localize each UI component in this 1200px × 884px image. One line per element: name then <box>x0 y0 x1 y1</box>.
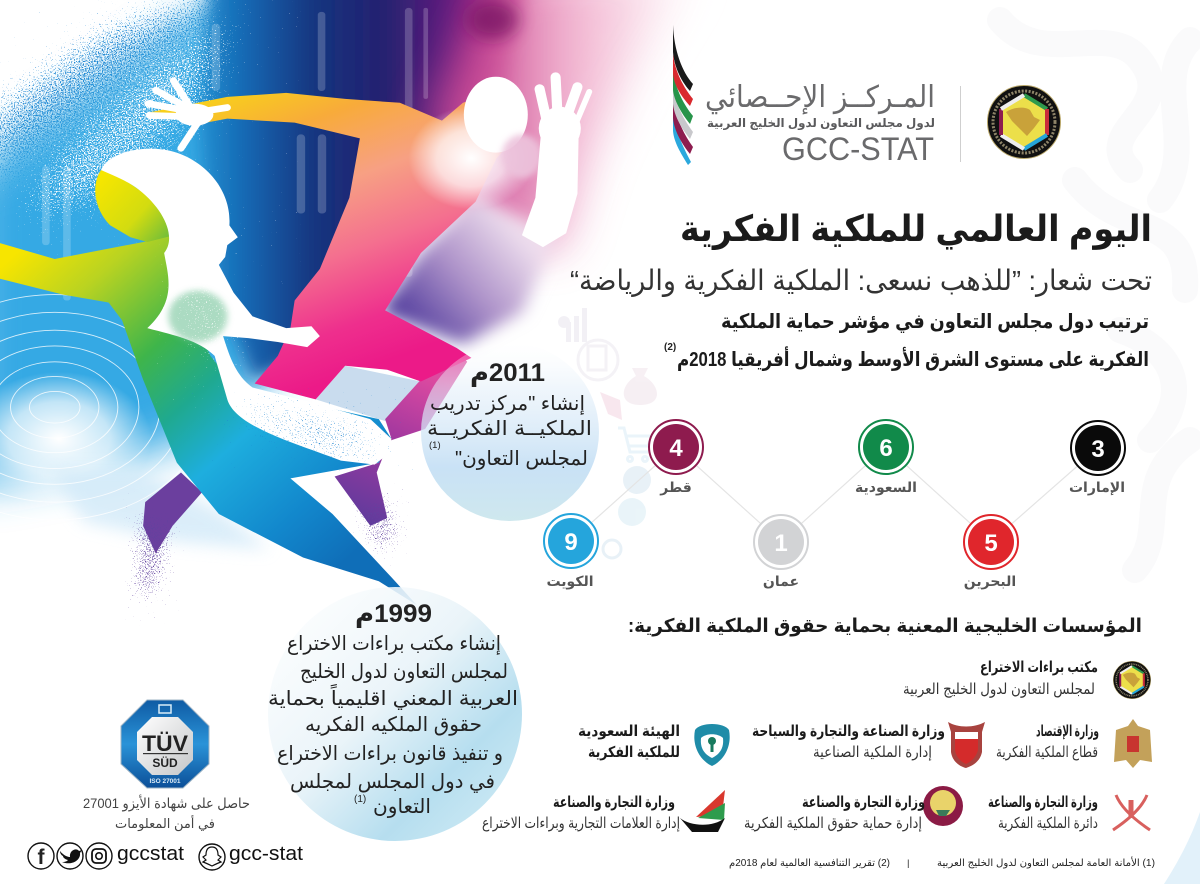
badge: TUV SUD ISO 27001 <box>121 700 209 788</box>
logo arabic name: المـركــز الإحــصائي <box>705 81 935 115</box>
runner 1: head <box>464 77 528 153</box>
icon: bar chart <box>558 308 587 342</box>
rank: Qatar: 4 <box>669 435 683 462</box>
spray: front foot <box>362 498 400 550</box>
text: line 2: الملكيــة الفكريــة <box>427 418 592 440</box>
logo: Saudi shield <box>694 724 730 766</box>
faint icons behind circle <box>558 308 657 558</box>
text: line 2: لمجلس التعاون لدول الخليج <box>300 661 508 683</box>
institution: Kuwait <box>482 790 725 832</box>
runner 2: back leg purple <box>143 473 202 554</box>
icon: handshake plant <box>600 392 622 420</box>
logo arabic subtitle: لدول مجلس التعاون لدول الخليج العربية <box>707 116 935 131</box>
text: line 7: التعاون <box>373 796 431 818</box>
runner 1: pale pink ear shadow <box>502 134 542 178</box>
runner 2: blue paint flecks on thigh <box>236 403 381 455</box>
rank: Qatar: قطر <box>659 479 692 496</box>
circle fill <box>421 343 599 521</box>
spray: white flecks on torso edge <box>173 269 231 380</box>
footnote 2: (2) تقرير التنافسية العالمية لعام 2018م <box>729 858 890 869</box>
artwork: two colour-splash runners <box>0 0 690 605</box>
pale mist at lower left <box>51 471 269 550</box>
swirl rings <box>0 295 206 520</box>
text: line 1: إنشاء مكتب براءات الاختراع <box>287 633 501 656</box>
rank: Oman <box>754 515 808 589</box>
bottom-right corner arc <box>1164 812 1200 884</box>
octagon <box>121 700 209 788</box>
name: وزارة التجارة والصناعة <box>988 794 1098 811</box>
splash: dark magenta smudge <box>467 0 518 40</box>
institution: Oman <box>988 794 1150 832</box>
icon: snapchat <box>199 844 225 870</box>
rank: UAE <box>1069 421 1125 496</box>
rank: Qatar <box>649 420 703 496</box>
spray: white dust on blue <box>17 12 236 221</box>
icon: shopping cart <box>618 428 652 462</box>
year 1999: 1999م <box>355 600 432 628</box>
institution: Saudi Arabia <box>578 723 730 766</box>
icon: gear <box>618 498 646 526</box>
icon: facebook: f <box>38 846 46 869</box>
icon: globe <box>623 466 651 494</box>
rank: Bahrain: البحرين <box>964 573 1016 590</box>
icon: tag <box>603 540 621 558</box>
name: وزارة التجارة والصناعة <box>553 794 675 811</box>
TUV: TÜV <box>142 731 188 756</box>
rank: Oman: 1 <box>774 530 788 557</box>
binary code columns <box>42 8 428 301</box>
name: وزارة التجارة والصناعة <box>802 794 925 811</box>
text: line 1: إنشاء "مركز تدريب <box>430 393 585 416</box>
runner 2: white head, chest and leading arm <box>101 149 391 465</box>
splash: dark blue to purple band <box>198 0 535 380</box>
footnote mark 2: (2) <box>664 342 676 353</box>
department: لمجلس التعاون لدول الخليج العربية <box>903 681 1095 698</box>
footnote separator: | <box>907 858 909 869</box>
rank: UAE: 3 <box>1091 436 1105 463</box>
logo latin name: GCC-STAT <box>782 131 934 167</box>
icon: instagram <box>86 843 112 869</box>
circle: 1999 <box>268 587 522 841</box>
icon: twitter <box>57 843 83 869</box>
icon: facebook <box>28 843 54 869</box>
logo: GCC-STAT <box>673 25 935 167</box>
institution: Bahrain <box>752 722 985 768</box>
heading: institutions: المؤسسات الخليجية المعنية بحماية حقوق الملكية الفكرية: <box>628 616 1142 637</box>
rank: Saudi Arabia: 6 <box>879 435 893 462</box>
text: line 4: حقوق الملكيه الفكريه <box>305 714 482 736</box>
rank: UAE: الإمارات <box>1069 479 1125 496</box>
text: line 6: في دول المجلس لمجلس <box>290 771 495 794</box>
subtitle: تحت شعار: ”للذهب نسعى: الملكية الفكرية والرياضة“ <box>570 265 1152 297</box>
institution: UAE <box>996 719 1152 768</box>
social icons <box>28 843 225 870</box>
icon: document <box>578 340 618 380</box>
ISO: ISO 27001 <box>149 778 181 785</box>
pale fill between legs <box>316 366 421 423</box>
icon: money bag <box>624 368 657 405</box>
text: line 3: لمجلس التعاون" <box>455 448 588 470</box>
name: وزارة الصناعة والتجارة والسياحة <box>752 723 945 740</box>
ribbon <box>673 25 693 165</box>
social handle: gcc-stat: gcc-stat <box>229 843 303 865</box>
runner 1: forward hand <box>148 81 227 148</box>
inner plate <box>137 717 193 775</box>
logo: Kuwait dhow <box>680 790 725 832</box>
splash: pink <box>429 0 690 253</box>
logo: GCC seal <box>988 86 1060 158</box>
runner 1: lower leg <box>335 354 467 526</box>
monitor icon <box>159 705 171 713</box>
background watermark calligraphy <box>1000 20 1190 570</box>
badge caption line 2: في أمن المعلومات <box>115 815 215 832</box>
runner 2: hair <box>95 170 182 242</box>
footnote mark: (1) <box>354 794 366 805</box>
department: للملكية الفكرية <box>588 744 680 761</box>
runner 1: body <box>147 91 522 399</box>
name: الهيئة السعودية <box>578 723 680 740</box>
rank: Saudi Arabia <box>855 420 917 496</box>
rank: Saudi Arabia: السعودية <box>855 479 917 496</box>
institution: Qatar <box>744 786 963 832</box>
runner 2: coloured body <box>0 233 417 605</box>
institution: GCC patent office <box>903 659 1151 699</box>
logo: UAE eagle <box>1114 719 1152 768</box>
runner 1: palm <box>176 104 213 126</box>
runner 1: raised hand and forearm <box>522 77 589 247</box>
runner 1: chest fade <box>408 107 535 210</box>
logo: GCC seal <box>1113 661 1151 699</box>
rank: Bahrain: 5 <box>984 530 998 557</box>
ranking connector <box>571 447 1098 542</box>
rank: Kuwait: الكويت <box>546 573 594 590</box>
logo: Qatar emblem <box>923 786 963 826</box>
footnote mark: (1) <box>429 440 441 451</box>
heading: ranking line 1: ترتيب دول مجلس التعاون في مؤشر حماية الملكية <box>721 311 1149 334</box>
spray: back foot <box>135 510 173 601</box>
rank: Kuwait <box>544 514 598 590</box>
name: مكتب براءات الاختراع <box>980 659 1098 676</box>
rule <box>143 753 188 754</box>
department: إدارة الملكية الصناعية <box>813 744 932 761</box>
circle: 2011 <box>421 343 599 521</box>
runner 2: green mist on chest <box>168 291 227 342</box>
text: line 5: و تنفيذ قانون براءات الاختراع <box>277 743 503 765</box>
text: line 3: العربية المعني اقليمياً بحماية <box>268 684 518 711</box>
department: إدارة حماية حقوق الملكية الفكرية <box>744 815 922 832</box>
logo: Oman swords <box>1113 795 1150 830</box>
rank: Kuwait: 9 <box>564 529 578 556</box>
department: إدارة العلامات التجارية وبراءات الاختراع <box>482 815 680 832</box>
swirl mist <box>0 372 152 506</box>
department: قطاع الملكية الفكرية <box>996 744 1098 761</box>
department: دائرة الملكية الفكرية <box>998 815 1098 832</box>
spray: pale blue dust at upper left <box>0 0 269 206</box>
rank: Bahrain <box>964 515 1018 590</box>
splash: light blue <box>0 0 320 486</box>
name: وزارة الإقتصاد <box>1036 723 1099 740</box>
rank: Oman: عمان <box>763 573 799 589</box>
social handle: gccstat: gccstat <box>117 843 184 865</box>
badge caption line 1: حاصل على شهادة الأيزو 27001 <box>83 794 250 812</box>
circle fill <box>268 587 522 841</box>
splash: lilac behind chest <box>379 198 556 344</box>
footnote 1: (1) الأمانة العامة لمجلس التعاون لدول الخليج العربية <box>937 856 1155 869</box>
title: اليوم العالمي للملكية الفكرية <box>680 208 1152 250</box>
divider <box>960 86 961 162</box>
year 2011: 2011م <box>470 359 545 387</box>
logo: Bahrain shield <box>948 722 985 768</box>
SUD: SÜD <box>152 755 178 770</box>
